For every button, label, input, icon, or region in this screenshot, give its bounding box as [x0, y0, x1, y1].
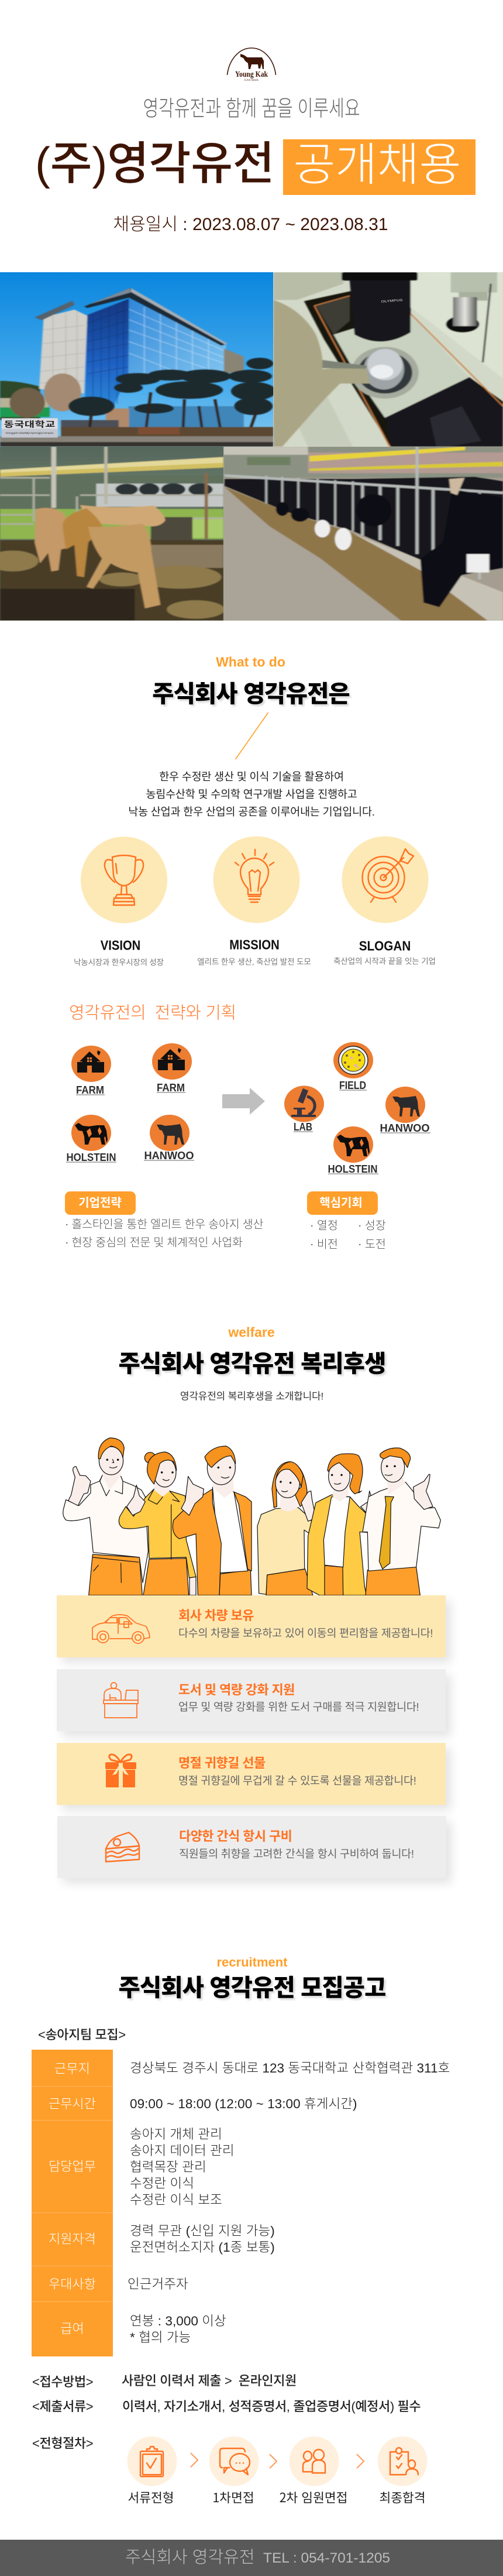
logo: Young Kak Live Stock	[227, 47, 276, 82]
icon: car	[92, 1614, 150, 1644]
team label: <송아지팀 모집>	[38, 2027, 126, 2042]
item: challenge: · 도전	[358, 1238, 386, 1251]
row: qualifications: 지원자격	[49, 2232, 96, 2246]
step: first interview: 1차면접	[212, 2488, 254, 2506]
row: duties: 협력목장 관리	[130, 2160, 206, 2174]
selection process: <전형절차>	[32, 2436, 93, 2451]
table: job details	[32, 2050, 450, 2356]
chevron 1	[191, 2453, 198, 2467]
selection process	[32, 2436, 427, 2506]
row: work location: 근무지	[54, 2061, 90, 2076]
row: work hours: 근무시간	[49, 2097, 96, 2111]
photo: embryo microscope: OLYMPUS	[381, 299, 404, 304]
application method	[32, 2373, 297, 2389]
person 5	[307, 1454, 386, 1595]
icon: field dish	[333, 1042, 373, 1078]
row: duties: 송아지 개체 관리	[130, 2127, 222, 2142]
title badge: 공개채용: 공개채용	[293, 139, 461, 190]
vision title: VISION	[101, 938, 140, 953]
card: snacks	[57, 1816, 446, 1878]
person 4	[257, 1462, 317, 1595]
icon: hanwoo	[150, 1115, 190, 1151]
eyebrow: recruitment: recruitment	[216, 1955, 288, 1969]
row: work hours	[32, 2087, 357, 2121]
card text: 직원들의 취향을 고려한 간식을 항시 구비하여 둡니다!	[179, 1848, 414, 1860]
row: salary: 연봉 : 3,000 이상	[130, 2314, 226, 2328]
hero header	[35, 47, 476, 234]
label: farm 2: FARM	[157, 1082, 185, 1094]
bullet 2: · 현장 중심의 전문 및 체계적인 사업화	[65, 1236, 243, 1249]
icon: holstein right	[333, 1126, 373, 1163]
panel: corporate strategy	[65, 1191, 263, 1249]
photo: university building under blue sky: Dongguk University Gyeongju Campus	[5, 432, 54, 435]
photo collage	[0, 272, 503, 621]
step: final pass: 최종합격	[379, 2488, 426, 2506]
slogan title: SLOGAN	[359, 938, 411, 953]
row: duties: 담당업무	[49, 2159, 96, 2174]
item: vision: · 비전	[310, 1238, 338, 1251]
badge	[307, 1191, 378, 1215]
mission text: 엘리트 한우 생산, 축산업 발전 도모	[197, 957, 311, 966]
title: company name: (주)영각유전	[35, 138, 274, 189]
slogan text: 축산업의 시작과 끝을 잇는 기업	[333, 957, 436, 965]
item: passion: · 열정	[310, 1219, 338, 1232]
logo: Young Kak Live Stock: Young Kak	[235, 70, 268, 78]
photo: university building under blue sky: 동국대학교	[4, 418, 55, 429]
label: holstein: HOLSTEIN	[67, 1152, 116, 1163]
person 3	[173, 1446, 252, 1595]
intro paragraph: 한우 수정란 생산 및 이식 기술을 활용하여	[159, 770, 344, 783]
badge	[65, 1191, 136, 1215]
heading: 주식회사 영각유전 복리후생	[118, 1350, 386, 1377]
panel: core opportunities	[307, 1191, 386, 1251]
row: duties	[32, 2121, 235, 2213]
application method: 사람인 이력서 제출 > 온라인지원	[122, 2373, 297, 2388]
row: qualifications: 운전면허소지자 (1종 보통)	[130, 2240, 275, 2255]
person 6	[363, 1448, 440, 1595]
icon: light bulb	[213, 836, 299, 923]
card: holiday gifts	[57, 1743, 446, 1805]
bullet 1: · 홀스타인을 통한 엘리트 한우 송아지 생산	[65, 1218, 263, 1231]
row: salary: 급여	[60, 2321, 84, 2336]
card: books and skills	[57, 1669, 446, 1731]
heading: 주식회사 영각유전은	[152, 680, 350, 707]
photo: university building under blue sky	[0, 272, 274, 447]
step: first interview	[209, 2437, 259, 2506]
eyebrow: welfare: welfare	[228, 1324, 275, 1340]
person 1	[63, 1438, 148, 1595]
intro paragraph: 농림수산학 및 수의학 연구개발 사업을 진행하고	[146, 788, 357, 800]
badge: 핵심기회	[319, 1197, 363, 1210]
recruitment dates: 채용일시 : 2023.08.07 ~ 2023.08.31	[113, 215, 388, 234]
card title: 회사 차량 보유	[178, 1608, 254, 1623]
footer company name: 주식회사 영각유전	[125, 2548, 255, 2567]
illustration: six employees thumbs up	[63, 1437, 441, 1595]
row: duties: 수정란 이식	[130, 2176, 194, 2191]
card title: 명절 귀향길 선물	[178, 1756, 266, 1770]
icon: farm 1	[71, 1046, 111, 1082]
label: farm 1: FARM	[76, 1084, 104, 1096]
section: company introduction	[65, 655, 436, 1251]
process steps	[128, 2437, 427, 2506]
step: document screening	[128, 2437, 177, 2506]
card title: 도서 및 역량 강화 지원	[178, 1683, 295, 1697]
icon: trophy	[81, 837, 167, 923]
icon: farm 2	[152, 1043, 192, 1080]
icon: cake slice	[105, 1831, 140, 1863]
footer telephone: TEL : 054-701-1205	[263, 2550, 390, 2566]
arrow	[222, 1088, 265, 1115]
photo: holstein cows feeding	[223, 446, 503, 621]
logo: Young Kak Live Stock: Live Stock	[244, 78, 259, 82]
heading: 주식회사 영각유전 모집공고	[118, 1974, 386, 2001]
person 2	[119, 1452, 196, 1595]
icon: lab microscope	[284, 1085, 324, 1122]
row: salary: * 협의 가능	[130, 2330, 191, 2345]
required documents: <제출서류>	[32, 2399, 93, 2414]
row: qualifications	[32, 2213, 275, 2266]
application method: <접수방법>	[32, 2375, 93, 2389]
subtitle: 영각유전의 복리후생을 소개합니다!	[180, 1391, 323, 1402]
row: duties: 송아지 데이터 관리	[130, 2143, 235, 2158]
card title: 다양한 간식 항시 구비	[179, 1829, 292, 1844]
diagram: strategy flow	[66, 1042, 430, 1175]
row: work location	[32, 2050, 450, 2087]
chevron 3	[357, 2454, 364, 2468]
icon: holstein	[71, 1115, 111, 1151]
row: preferences	[32, 2266, 188, 2302]
card text: 다수의 차량을 보유하고 있어 이동의 편리함을 제공합니다!	[178, 1627, 433, 1639]
icon: target	[342, 836, 428, 923]
section: welfare	[57, 1324, 454, 1886]
icon: person at desk	[103, 1682, 139, 1718]
row: salary	[32, 2302, 226, 2356]
label: field: FIELD	[339, 1080, 366, 1091]
step: executive interview: 2차 임원면접	[280, 2488, 347, 2506]
row: preferences: 인근거주자	[128, 2277, 188, 2291]
label: holstein right: HOLSTEIN	[328, 1163, 378, 1175]
eyebrow: What to do: What to do	[216, 655, 285, 670]
photo: calves in pen	[0, 446, 223, 621]
tagline: 영각유전과 함께 꿈을 이루세요	[143, 97, 360, 121]
item: growth: · 성장	[358, 1219, 386, 1232]
step: executive interview	[280, 2437, 347, 2506]
strategy heading: 영각유전의 전략와 기획	[69, 1003, 236, 1022]
row: qualifications: 경력 무관 (신입 지원 가능)	[130, 2224, 275, 2238]
row: preferences: 우대사항	[49, 2277, 96, 2291]
row: work hours: 09:00 ~ 18:00 (12:00 ~ 13:00 휴게시간)	[130, 2097, 357, 2111]
card text: 업무 및 역량 강화를 위한 도서 구매를 적극 지원합니다!	[178, 1701, 419, 1713]
footer	[0, 2540, 503, 2576]
slash accent	[235, 712, 269, 760]
row: duties: 수정란 이식 보조	[130, 2193, 222, 2207]
icon: gift	[105, 1753, 136, 1787]
pillar: vision	[74, 837, 167, 967]
label: hanwoo right: HANWOO	[380, 1122, 429, 1134]
pillar: slogan	[333, 836, 436, 965]
card text: 명절 귀향길에 무겁게 갈 수 있도록 선물을 제공합니다!	[178, 1775, 416, 1787]
card: company vehicles	[57, 1595, 446, 1657]
vision text: 낙농시장과 한우시장의 성장	[74, 958, 164, 967]
required documents: 이력서, 자기소개서, 성적증명서, 졸업증명서(예정서) 필수	[122, 2399, 421, 2414]
step: final pass	[378, 2437, 427, 2506]
intro paragraph	[128, 770, 375, 818]
pillar: mission	[197, 836, 311, 966]
chevron 2	[270, 2454, 277, 2468]
step: document screening: 서류전형	[128, 2488, 174, 2506]
mission title: MISSION	[229, 937, 279, 952]
section: recruitment	[32, 1955, 450, 2506]
icon: hanwoo right	[385, 1087, 425, 1123]
label: lab: LAB	[294, 1121, 312, 1133]
badge: 기업전략	[78, 1197, 122, 1210]
label: hanwoo: HANWOO	[144, 1150, 194, 1162]
intro paragraph: 낙농 산업과 한우 산업의 공존을 이루어내는 기업입니다.	[128, 806, 375, 818]
row: work location: 경상북도 경주시 동대로 123 동국대학교 산학협력관 311호	[130, 2061, 450, 2075]
photo: embryo microscope	[273, 272, 503, 447]
